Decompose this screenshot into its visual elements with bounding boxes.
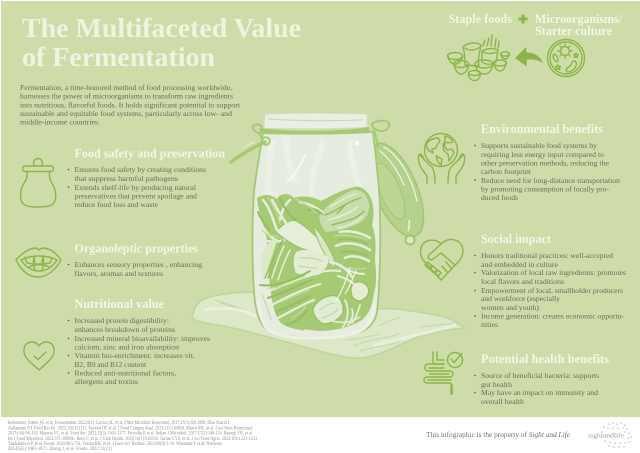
bullet list: May have an impact on immunity and [481, 388, 598, 397]
icon: petri dish with microorganisms [548, 40, 584, 76]
bullet list: preservatives that prevent spoilage and [74, 192, 197, 200]
open lid [357, 136, 435, 244]
heading: Social impact [481, 232, 552, 246]
bullet list [474, 251, 626, 329]
icon: heart with check mark [24, 342, 54, 370]
top equation: staple foods plus microorganisms [448, 12, 622, 80]
cloth [192, 292, 465, 358]
icon: fermentation pot [20, 158, 56, 207]
references [8, 421, 258, 452]
bullet list [474, 141, 620, 202]
intro text [20, 83, 241, 126]
bullet list: reduce food loss and waste [74, 200, 159, 209]
bullet list: carbon footprint [481, 167, 532, 176]
bullet list: Increased protein digestibility: [74, 316, 169, 325]
bullet list: Supports sustainable food systems by [481, 141, 597, 150]
intro text: sustainable and equitable food systems, particularly across low- and [20, 109, 232, 118]
illustration: fermentation jar on cloth [192, 113, 465, 358]
bullet list [68, 316, 210, 386]
title [22, 13, 301, 72]
bullet list: that suppress harmful pathogens [74, 174, 178, 183]
panel: social impact [420, 232, 626, 329]
jar rim [253, 113, 389, 135]
bullet list: overall health [481, 397, 524, 406]
heading: Food safety and preservation [74, 146, 225, 160]
heading: Nutritional value [74, 297, 164, 311]
property notice: This infographic is the property of Sight and Life [426, 430, 571, 439]
bullet list: other preservation methods, reducing the [481, 158, 610, 168]
bullet list: Valorization of local raw ingredients: promotes [481, 268, 626, 277]
bullet list: flavors, aromas and textures [74, 269, 163, 278]
heading: Potential health benefits [481, 352, 609, 366]
panel: organoleptic properties [16, 242, 202, 278]
bullet list: nities [481, 320, 498, 329]
bullet list: enhances breakdown of proteins [74, 325, 175, 334]
bullet list: and embedded in culture [481, 260, 559, 269]
bullet list [474, 371, 599, 406]
references: References: Adebo JA, et al. Fermentation. 2022;8(2). Carrizo SL, et al. J Mol Microbiol Biotechnol. 2017;27(5):289-2908. Dike Osaria I, [8, 421, 230, 426]
references: 2014;6(5):1861-1873. Zhang J, et al. Foods. 2022;11(21). [8, 447, 113, 452]
references: Thafrakkhou P, et al. Foods. 2020;9(6):734. Varsha KK, et al. J Food Sci Technol. 2022;60(9):1-10. Watanabe F et al. Nutrients. [8, 442, 223, 447]
icon: staple food bowls [448, 35, 510, 80]
intro text: into nutritious, flavorful foods. It holds significant potential to support [20, 100, 241, 110]
plus sign [518, 14, 528, 24]
panel: food safety and preservation [20, 146, 225, 209]
references: Int J Food Microbiol. 2022;371:109666. Reid G, et al. J Glob Health. 2020;10(1):010330. Tachie CYE, et al. J Sci Food Agric. 2023;104:1223-1233. [8, 437, 258, 442]
logo: sight and life [588, 422, 632, 448]
bullet list: allergens and toxins [74, 377, 138, 386]
bullet list: and workforce (especially [481, 294, 560, 303]
bullet list: Enhances sensory properties , enhancing [74, 260, 202, 269]
bullet list: Source of beneficial bacteria: supports [481, 371, 599, 380]
bullet list: Honors traditional practices: well-accepted [481, 251, 613, 260]
icon: smiling mouth [16, 248, 61, 277]
title: The Multifaceted Value [22, 13, 301, 43]
bullet list: by promoting consumption of locally pro- [481, 184, 609, 194]
heading: Environmental benefits [481, 122, 603, 136]
bullet list [68, 165, 206, 209]
bullet list: women and youth) [481, 303, 539, 312]
panel: nutritional value [24, 297, 210, 386]
bullet list: Vitamin bio-enrichment: increases vit. [74, 351, 195, 360]
left clasp [231, 130, 378, 162]
title: of Fermentation [22, 42, 215, 72]
jar body [252, 132, 380, 337]
bullet list: Income generation: creates economic opportu- [481, 312, 624, 320]
bullet list: Empowerment of local, smallholder producers [481, 286, 623, 295]
bullet list: requiring less energy input compared to [481, 150, 604, 159]
bullet list: local flavors and traditions [481, 277, 564, 286]
icon: handshake in heart [420, 240, 463, 280]
jar contents: fermenting vegetables [257, 187, 376, 332]
logo: sight and life: sightandlife [588, 432, 624, 440]
bullet list: Ensures food safety by creating conditions [74, 165, 206, 174]
icon: gut with check mark [424, 352, 462, 394]
bullet list: calcium, zinc and iron absorption [74, 342, 179, 352]
icon: curved arrow [515, 47, 543, 66]
icon: hands holding globe [418, 134, 465, 183]
jar glass highlight [258, 300, 375, 338]
bullet list: Extends shelf-life by producing natural [74, 183, 196, 192]
panel: environmental benefits [418, 122, 620, 202]
bullet list: Increased mineral bioavailability: improves [74, 334, 210, 343]
panel: potential health benefits [424, 352, 609, 406]
bullet list: gut health [481, 380, 512, 389]
bullet list: Reduced anti-nutritional factors, [74, 368, 176, 378]
label: microorganisms: Microorganisms/ [535, 12, 622, 26]
label: staple foods: Staple foods [448, 12, 512, 26]
references: 2017;(44):94–102. Materia VC, et al. Food Sec. 2021;13(5):1163–1177. Priyodip P, et al. Indian J Microbiol. 2017;57(2):148-154. Rastogi YR, et al. [8, 432, 253, 436]
references: Aatlanaran OJ. Food Res Int. 2022;156:111115. Fayemi OE et al. J Food Compos Anal. 2023;115:104850. Marco ML, et al. Curr Opin Biotechnol. [8, 426, 253, 432]
intro text: middle-income countries. [20, 118, 100, 126]
bullet list: Reduce need for long-distance transportation [481, 176, 620, 185]
label: microorganisms [535, 12, 622, 38]
label: microorganisms: Starter culture [535, 24, 612, 38]
bullet list: B2, B9 and B12 content [74, 360, 147, 369]
intro text: Fermentation, a time-honored method of food processing worldwide, [20, 83, 232, 92]
bullet list: duced foods [481, 193, 518, 202]
heading: Organoleptic properties [74, 242, 198, 256]
bullet list [68, 260, 202, 278]
intro text: harnesses the power of microorganisms to transform raw ingredients [20, 92, 233, 100]
